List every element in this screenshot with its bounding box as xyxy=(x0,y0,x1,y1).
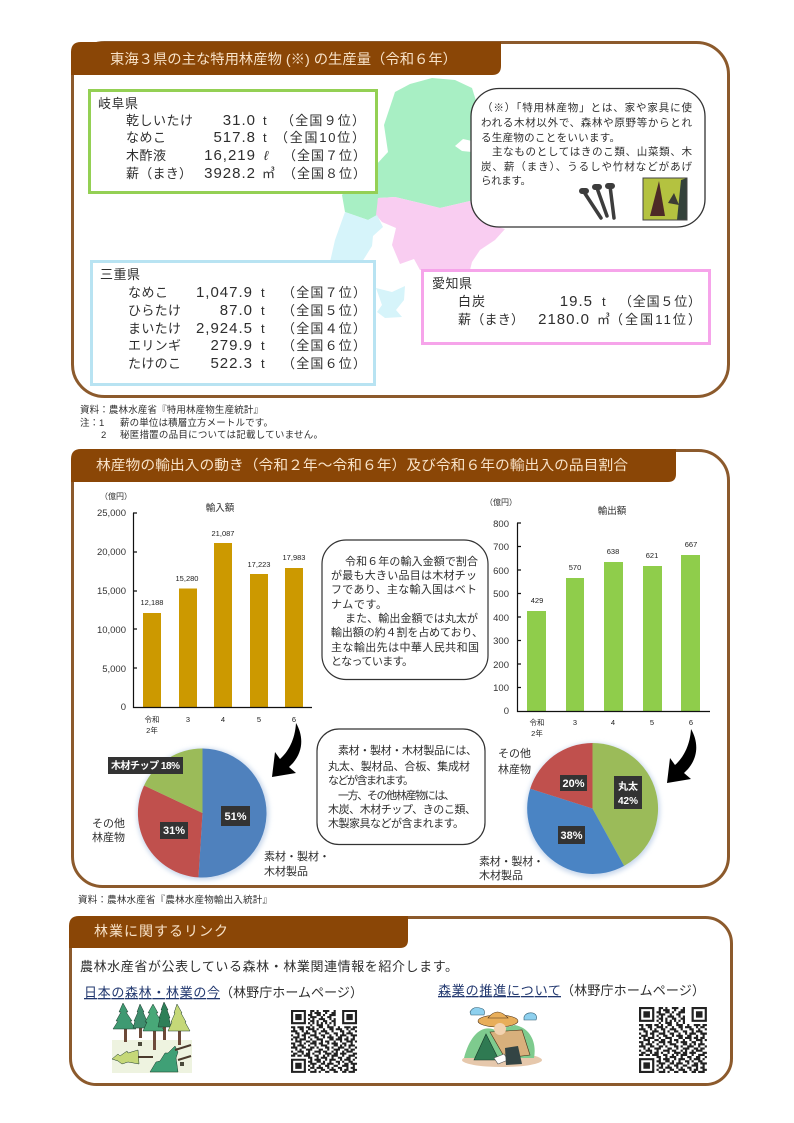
bar chart: exports: 300 xyxy=(493,636,509,647)
callout: product categories: 丸太、製材品、合板、集成材 xyxy=(328,759,470,773)
box: Mie prefecture: t xyxy=(261,285,265,300)
box: Mie prefecture: （全国６位） xyxy=(282,338,366,353)
bar chart: imports: 令和 xyxy=(144,714,160,724)
label: logs 42%: 丸太 xyxy=(618,780,638,793)
callout: trade summary: が最も大きい品目は木材チッ xyxy=(331,568,477,582)
callout: product categories: などが含まれます。 xyxy=(328,773,414,787)
bar chart: exports: 6 xyxy=(689,718,693,727)
map of Tokai prefectures xyxy=(330,78,505,318)
box: Mie prefecture: t xyxy=(261,321,265,336)
label: 51%: 51% xyxy=(224,811,247,823)
link: state of forests xyxy=(84,985,363,1000)
QR code: state of forests xyxy=(291,1010,357,1073)
label: other forest products: 林産物 xyxy=(92,830,125,844)
export bars xyxy=(527,555,700,711)
illustration: forest and felled trees xyxy=(112,1002,192,1073)
intro text: 農林水産省が公表している森林・林業関連情報を紹介します。 xyxy=(80,959,458,974)
label: 20% xyxy=(560,775,587,791)
panel: tokai production xyxy=(71,42,728,396)
box: Gifu prefecture: 木酢液 xyxy=(126,148,166,163)
box: Mie prefecture: ひらたけ xyxy=(128,303,181,318)
arrow: export bar to pie xyxy=(667,729,696,783)
callout: trade summary: 主な輸出先は中華人民共和国 xyxy=(331,641,479,654)
box: Gifu prefecture: （全国８位） xyxy=(283,166,366,181)
box: Mie prefecture: 279.9 xyxy=(210,337,253,354)
label: 51% xyxy=(221,806,250,826)
box: Gifu prefecture xyxy=(90,90,376,192)
box: Aichi prefecture: 薪（まき） xyxy=(458,312,524,327)
label: materials and wood products: 木材製品 xyxy=(264,864,308,878)
box: Mie prefecture: 87.0 xyxy=(220,302,253,319)
box: Gifu prefecture: （全国７位） xyxy=(283,148,366,163)
box: Aichi prefecture: t xyxy=(602,294,606,309)
bar chart: exports: 100 xyxy=(493,683,509,694)
bar chart: exports xyxy=(485,497,710,738)
arrow: import bar to pie xyxy=(272,723,301,777)
callout: definition of special forest products: 炭、薪（まき）、うるしや竹材などがあげ xyxy=(481,160,692,173)
box: Gifu prefecture: t xyxy=(263,113,267,128)
box: Gifu prefecture: 乾しいたけ xyxy=(126,113,193,128)
bar chart: exports: 621 xyxy=(646,551,658,560)
bar chart: imports: 15,280 xyxy=(176,574,198,583)
bar chart: exports: 200 xyxy=(493,660,509,671)
bar chart: exports: 600 xyxy=(493,566,509,577)
link: state of forests: （林野庁ホームページ） xyxy=(220,985,363,1000)
callout: definition of special forest products: る生産物のことをいいます。 xyxy=(481,131,620,144)
bar chart: imports: （億円） xyxy=(100,491,132,501)
link: promotion of forestry xyxy=(438,983,705,998)
callout: definition of special forest products xyxy=(471,88,705,227)
bar chart: imports xyxy=(97,491,312,735)
icon: bamboo and shoots xyxy=(643,178,687,220)
bar chart: imports: 15,000 xyxy=(97,586,126,597)
label: wood chips 18% xyxy=(108,757,183,774)
label: other forest products xyxy=(92,817,125,844)
source notes: production statistics: 注：1 xyxy=(80,417,104,429)
box: Mie prefecture: （全国７位） xyxy=(282,285,366,300)
label: other forest products: その他 xyxy=(498,747,531,760)
box: Mie prefecture: t xyxy=(261,356,265,371)
label: other forest products: その他 xyxy=(92,817,125,830)
heading bar: tokai production xyxy=(71,42,501,75)
bar chart: exports: 638 xyxy=(607,547,619,556)
callout: product categories xyxy=(317,729,485,844)
callout: product categories: 素材・製材・木材製品には、 xyxy=(338,743,477,757)
heading bar: tokai production: 東海３県の主な特用林産物 (※) の生産量（令和６年） xyxy=(110,51,457,67)
box: Mie prefecture xyxy=(92,262,374,384)
box: Mie prefecture: （全国４位） xyxy=(282,321,366,336)
link: state of forests: 日本の森林・林業の今 xyxy=(84,985,220,1000)
source notes: production statistics xyxy=(80,404,323,441)
bar chart: exports: 5 xyxy=(650,718,654,727)
box: Gifu prefecture: ㎥ xyxy=(262,166,275,181)
heading bar: forestry links: 林業に関するリンク xyxy=(94,923,228,939)
label: other forest products: 林産物 xyxy=(498,762,531,776)
callout: trade summary: 令和６年の輸入金額で割合 xyxy=(345,554,478,568)
bar chart: imports: 20,000 xyxy=(97,547,126,558)
label: materials and wood products xyxy=(479,854,544,882)
box: Mie prefecture: まいたけ xyxy=(128,321,181,336)
bar chart: exports: 700 xyxy=(493,542,509,553)
box: Gifu prefecture: （全国10位） xyxy=(275,130,365,145)
callout: product categories: 木炭、木材チップ、きのこ類、 xyxy=(328,802,476,816)
illustration: forester planting xyxy=(462,1008,542,1067)
box: Aichi prefecture: 白炭 xyxy=(458,294,485,309)
box: Mie prefecture: t xyxy=(261,303,265,318)
bar chart: exports: （億円） xyxy=(485,497,517,507)
bar chart: imports: 6 xyxy=(292,715,296,724)
box: Aichi prefecture: 愛知県 xyxy=(432,276,472,291)
bar chart: imports: 25,000 xyxy=(97,508,126,519)
callout: trade summary: フであり、主な輸入国はベト xyxy=(331,583,477,596)
bar chart: exports: 2年 xyxy=(531,728,543,738)
link: promotion of forestry: （林野庁ホームページ） xyxy=(561,983,705,998)
pie chart: export shares xyxy=(479,743,660,882)
link: promotion of forestry: 森業の推進について xyxy=(438,983,561,998)
bar chart: exports: 800 xyxy=(493,519,509,530)
bar chart: imports: 12,188 xyxy=(141,598,163,607)
callout: trade summary: となっています。 xyxy=(331,655,413,668)
import bars xyxy=(143,543,303,707)
panel: forestry links xyxy=(69,916,732,1084)
box: Aichi prefecture: （全国５位） xyxy=(619,294,701,309)
box: Mie prefecture: なめこ xyxy=(128,285,168,300)
source notes: production statistics: 2 xyxy=(101,430,106,441)
box: Gifu prefecture: 3928.2 xyxy=(204,165,256,182)
box: Mie prefecture: （全国６位） xyxy=(282,356,366,371)
pie chart: import shares xyxy=(92,748,330,880)
label: logs 42%: 42% xyxy=(618,796,638,807)
callout: definition of special forest products: 主なものとしてはきのこ類、山菜類、木 xyxy=(492,146,692,158)
callout: definition of special forest products: われる木材以外で、森林や原野等からとれ xyxy=(481,116,692,129)
callout: trade summary: ナムです。 xyxy=(331,598,387,611)
box: Aichi prefecture: 2180.0 xyxy=(538,311,590,328)
bar chart: imports: 輸入額 xyxy=(206,502,235,514)
box: Gifu prefecture: （全国９位） xyxy=(281,113,365,128)
panel: forest product trade xyxy=(71,449,728,886)
heading bar: forest product trade xyxy=(71,449,676,482)
box: Gifu prefecture: t xyxy=(263,130,267,145)
box: Aichi prefecture: 19.5 xyxy=(560,293,593,310)
box: Gifu prefecture: 薪（まき） xyxy=(126,166,192,181)
box: Gifu prefecture: 岐阜県 xyxy=(98,96,138,111)
label: 38% xyxy=(558,826,585,844)
box: Mie prefecture: t xyxy=(261,338,265,353)
bar chart: exports: 令和 xyxy=(530,717,544,727)
heading bar: forestry links xyxy=(69,916,408,948)
bar chart: exports: 500 xyxy=(493,589,509,600)
QR code: promotion of forestry xyxy=(639,1007,707,1073)
source notes: production statistics: 秘匿措置の品目については記載していません。 xyxy=(120,429,323,441)
box: Mie prefecture: （全国５位） xyxy=(282,303,366,318)
box: Aichi prefecture: （全国11位） xyxy=(610,312,701,327)
bar chart: imports: 10,000 xyxy=(97,625,126,636)
icon: charcoal sticks xyxy=(582,186,614,218)
bar chart: exports: 400 xyxy=(493,613,509,624)
box: Gifu prefecture: なめこ xyxy=(126,130,166,145)
box: Mie prefecture: エリンギ xyxy=(128,338,181,353)
box: Gifu prefecture: 517.8 xyxy=(213,129,256,146)
box: Mie prefecture: たけのこ xyxy=(128,356,181,371)
callout: trade summary: また、輸出金額では丸太が xyxy=(345,611,478,625)
callout: product categories: 一方、その他林産物には、 xyxy=(338,788,455,802)
box: Mie prefecture: 1,047.9 xyxy=(196,284,253,301)
box: Aichi prefecture xyxy=(422,270,710,344)
label: wood chips 18%: 木材チップ 18% xyxy=(111,759,180,772)
box: Mie prefecture: 2,924.5 xyxy=(196,320,253,337)
label: other forest products xyxy=(498,747,531,776)
bar chart: exports: 667 xyxy=(685,540,697,549)
bar chart: imports: 2年 xyxy=(146,725,158,735)
label: 20%: 20% xyxy=(562,778,585,790)
label: 31%: 31% xyxy=(163,825,185,837)
bar chart: imports: 17,223 xyxy=(248,560,270,569)
bar chart: imports: 3 xyxy=(186,715,190,724)
bar chart: exports: 3 xyxy=(573,718,577,727)
bar chart: imports: 5,000 xyxy=(102,664,126,675)
bar chart: exports: 429 xyxy=(531,596,543,605)
bar chart: imports: 21,087 xyxy=(212,529,234,538)
callout: trade summary xyxy=(322,540,488,680)
callout: product categories: 木製家具などが含まれます。 xyxy=(328,816,464,830)
bar chart: exports: 0 xyxy=(504,706,509,717)
label: materials and wood products: 素材・製材・ xyxy=(264,849,330,863)
callout: definition of special forest products: られます。 xyxy=(481,175,531,187)
box: Aichi prefecture: ㎥ xyxy=(597,312,610,327)
bar chart: imports: 0 xyxy=(121,702,126,713)
bar chart: exports: 輸出額 xyxy=(598,505,627,517)
callout: trade summary: 輸出額の約４割を占めており、 xyxy=(331,625,483,639)
bar chart: imports: 17,983 xyxy=(283,553,305,562)
source notes: production statistics: 薪の単位は積層立方メートルです。 xyxy=(120,417,273,429)
heading bar: forest product trade: 林産物の輸出入の動き（令和２年～令和６年）及び令和６年の輸出入の品目割合 xyxy=(96,457,628,473)
source note: trade statistics: 資料：農林水産省『農林水産物輸出入統計』 xyxy=(78,894,272,906)
box: Mie prefecture: 522.3 xyxy=(210,355,253,372)
box: Gifu prefecture: 31.0 xyxy=(223,112,256,129)
label: 31% xyxy=(160,822,188,839)
bar chart: exports: 570 xyxy=(569,563,581,572)
bar chart: imports: 4 xyxy=(221,715,225,724)
label: logs 42% xyxy=(614,776,642,809)
box: Gifu prefecture: ℓ xyxy=(264,148,269,163)
source notes: production statistics: 資料：農林水産省『特用林産物生産統計』 xyxy=(80,404,263,416)
callout: definition of special forest products: （※）「特用林産物」とは、家や家具に使 xyxy=(482,101,692,114)
bar chart: exports: 4 xyxy=(611,718,615,727)
label: materials and wood products: 木材製品 xyxy=(479,868,523,882)
box: Gifu prefecture: 16,219 xyxy=(204,147,256,164)
bar chart: imports: 5 xyxy=(257,715,261,724)
label: materials and wood products xyxy=(264,849,330,878)
box: Mie prefecture: 三重県 xyxy=(100,267,140,282)
label: materials and wood products: 素材・製材・ xyxy=(479,854,544,868)
label: 38%: 38% xyxy=(560,830,583,842)
